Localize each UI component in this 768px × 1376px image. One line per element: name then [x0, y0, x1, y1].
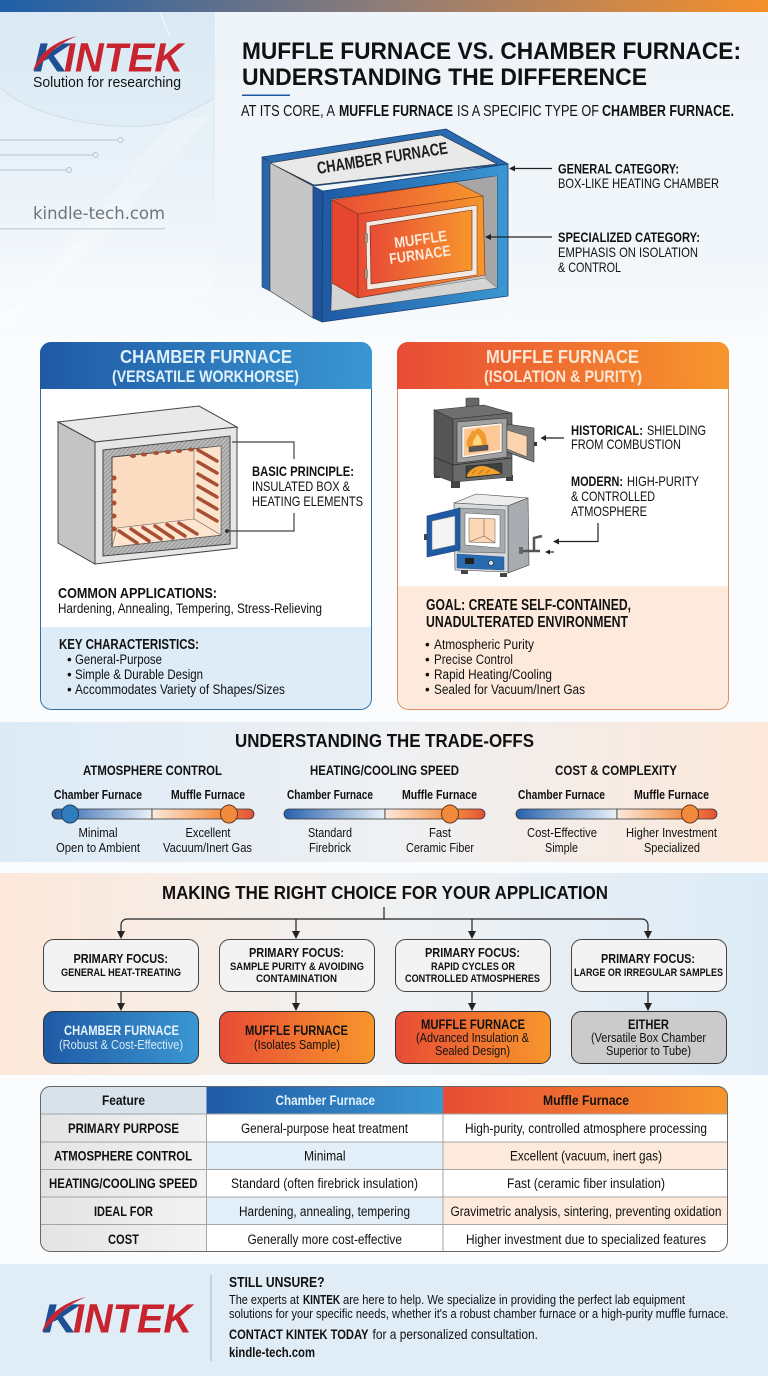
- decorative circuit lines: [0, 138, 123, 172]
- arrow: historical: [540, 435, 564, 441]
- text: basic principle: HEATING ELEMENTS: [252, 493, 363, 509]
- result box: chamber furnace: (Robust & Cost-Effective): [59, 1037, 183, 1052]
- callout: specialized category: & CONTROL: [558, 259, 621, 275]
- callout: general category: GENERAL CATEGORY:: [558, 160, 679, 176]
- row: heating/cooling speed: Standard (often firebrick insulation): [231, 1176, 418, 1191]
- text: modern: ATMOSPHERE: [571, 503, 647, 519]
- result box: muffle furnace advanced insulation: (Advanced Insulation &: [416, 1030, 529, 1045]
- callout: specialized category: SPECIALIZED CATEGORY:: [558, 229, 700, 245]
- goal band: [398, 586, 728, 709]
- row: atmosphere control: Excellent (vacuum, inert gas): [510, 1148, 662, 1164]
- row: heating/cooling speed: Fast (ceramic fiber insulation): [507, 1176, 665, 1191]
- result box: chamber furnace: CHAMBER FURNACE: [64, 1023, 179, 1038]
- result box: muffle furnace isolates sample: [220, 1012, 374, 1064]
- text: historical: SHIELDING: [647, 422, 706, 438]
- row: ideal for: IDEAL FOR: [94, 1203, 153, 1219]
- text: basic principle: BASIC PRINCIPLE:: [252, 463, 354, 479]
- muffle panel header: [397, 342, 729, 389]
- call to action text: [229, 1274, 728, 1360]
- logo: KINTEK header: K: [33, 34, 73, 80]
- key characteristics band: •: [67, 652, 72, 667]
- slider: heating/cooling speed: Ceramic Fiber: [406, 840, 475, 855]
- key characteristics band: General-Purpose: [75, 652, 162, 667]
- section: right choice: [0, 873, 768, 1075]
- title: MUFFLE FURNACE VS. CHAMBER FURNACE:: [242, 38, 741, 65]
- slider: heating/cooling speed: HEATING/COOLING SPEED: [310, 762, 459, 778]
- call to action text: KINTEK: [303, 1292, 340, 1307]
- callout: specialized category: [558, 229, 700, 275]
- icon: modern muffle furnace: [424, 494, 542, 577]
- result box: either: EITHER: [628, 1017, 669, 1032]
- result box: muffle furnace isolates sample: (Isolates Sample): [254, 1037, 340, 1052]
- text: common applications: COMMON APPLICATIONS:: [58, 585, 217, 602]
- slider: atmosphere control: Muffle Furnace: [171, 787, 245, 802]
- slider: atmosphere control: Open to Ambient: [56, 840, 140, 855]
- diagram: chamber furnace containing muffle furnace: [262, 129, 508, 322]
- focus box: rapid cycles: PRIMARY FOCUS:: [425, 945, 520, 960]
- result box: muffle furnace advanced insulation: [396, 1012, 550, 1064]
- slider: cost and complexity: Cost-Effective: [527, 825, 597, 840]
- chamber panel header: (VERSATILE WORKHORSE): [112, 368, 299, 386]
- call to action text: kindle-tech.com: [229, 1344, 315, 1360]
- goal band: Sealed for Vacuum/Inert Gas: [434, 682, 585, 697]
- comparison table: [40, 1086, 728, 1252]
- table header row: Chamber Furnace: [276, 1093, 375, 1108]
- muffle panel header: MUFFLE FURNACE: [486, 347, 639, 367]
- row: primary purpose: PRIMARY PURPOSE: [68, 1120, 179, 1136]
- subtitle: AT ITS CORE, A: [241, 103, 336, 120]
- result box: chamber furnace: [44, 1012, 198, 1064]
- logo: KINTEK footer: K: [42, 1296, 82, 1342]
- text: modern: [571, 473, 700, 519]
- logo: KINTEK header: Solution for researching: [33, 74, 181, 91]
- call to action text: The experts at: [229, 1292, 299, 1307]
- slider: atmosphere control: Excellent: [186, 825, 231, 840]
- row: primary purpose: High-purity, controlled atmosphere processing: [465, 1121, 707, 1136]
- chamber panel header: CHAMBER FURNACE: [120, 347, 292, 367]
- row: atmosphere control: [54, 1148, 662, 1164]
- row: atmosphere control: Minimal: [304, 1148, 346, 1164]
- focus box: sample purity: SAMPLE PURITY & AVOIDING: [230, 961, 364, 973]
- goal band: •: [425, 682, 430, 697]
- result box: muffle furnace advanced insulation: MUFFLE FURNACE: [421, 1017, 525, 1032]
- panel: muffle furnace: [397, 342, 729, 710]
- table header row: Feature: [102, 1093, 145, 1108]
- focus box: rapid cycles: RAPID CYCLES OR: [431, 961, 515, 973]
- call to action text: are here to help. We specialize in providing the perfect lab equipment: [343, 1292, 685, 1307]
- website label: kindle-tech.com: [33, 204, 165, 224]
- text: modern: MODERN:: [571, 473, 623, 489]
- goal band: GOAL: CREATE SELF-CONTAINED,: [426, 597, 631, 614]
- slider: cost and complexity: Chamber Furnace: [518, 787, 605, 802]
- goal band: Atmospheric Purity: [434, 637, 534, 652]
- arrow: general category: [509, 166, 552, 172]
- logo: KINTEK header: INTEK: [64, 34, 186, 80]
- text: modern: & CONTROLLED: [571, 488, 655, 504]
- call to action text: STILL UNSURE?: [229, 1274, 324, 1291]
- row: cost: COST: [108, 1231, 139, 1247]
- row: atmosphere control: ATMOSPHERE CONTROL: [54, 1148, 192, 1164]
- table header row: Muffle Furnace: [543, 1093, 629, 1108]
- row: ideal for: [94, 1203, 722, 1219]
- text: modern: HIGH-PURITY: [627, 473, 700, 489]
- goal band: •: [425, 637, 430, 652]
- table header row: [102, 1093, 629, 1108]
- slider: atmosphere control: Chamber Furnace: [54, 787, 142, 802]
- focus box: rapid cycles: [396, 940, 550, 992]
- text: basic principle: INSULATED BOX &: [252, 478, 351, 494]
- slider: heating/cooling speed: Fast: [429, 825, 451, 840]
- slider: heating/cooling speed: [284, 762, 485, 855]
- chamber panel header: [40, 342, 372, 389]
- focus box: rapid cycles: CONTROLLED ATMOSPHERES: [405, 973, 540, 985]
- decision tree connectors: [117, 907, 652, 1011]
- text: historical: HISTORICAL:: [571, 422, 643, 438]
- goal band: Precise Control: [434, 652, 513, 667]
- goal band: •: [425, 667, 430, 682]
- slider: heating/cooling speed: Chamber Furnace: [287, 787, 373, 802]
- slider: cost and complexity: Simple: [545, 840, 578, 855]
- focus box: sample purity: [220, 940, 374, 992]
- key characteristics band: Simple & Durable Design: [75, 667, 203, 682]
- goal band: •: [425, 652, 430, 667]
- muffle panel header: (ISOLATION & PURITY): [484, 368, 642, 386]
- logo: KINTEK header: [33, 34, 186, 91]
- key characteristics band: Accommodates Variety of Shapes/Sizes: [75, 682, 285, 697]
- diagram: chamber furnace containing muffle furnace: MUFFLE: [393, 228, 448, 252]
- diagram: chamber furnace containing muffle furnace: CHAMBER FURNACE: [316, 139, 449, 178]
- top colour bar: [0, 0, 768, 12]
- slider: atmosphere control: [52, 762, 254, 855]
- call to action text: for a personalized consultation.: [372, 1326, 538, 1342]
- callout: general category: [558, 160, 719, 191]
- subtitle: CHAMBER FURNACE.: [602, 103, 734, 120]
- goal band: Rapid Heating/Cooling: [434, 667, 552, 682]
- callout: specialized category: EMPHASIS ON ISOLATION: [558, 244, 698, 260]
- focus box: large samples: [572, 940, 726, 992]
- result box: muffle furnace isolates sample: MUFFLE FURNACE: [245, 1023, 348, 1038]
- slider: heating/cooling speed: Standard: [308, 825, 352, 840]
- subtitle: [241, 103, 734, 120]
- slider: atmosphere control: ATMOSPHERE CONTROL: [83, 762, 222, 778]
- callout lines: basic principle: [226, 442, 294, 532]
- logo: KINTEK footer: INTEK: [73, 1296, 195, 1342]
- row: primary purpose: General-purpose heat treatment: [241, 1121, 408, 1136]
- focus box: sample purity: CONTAMINATION: [256, 973, 337, 985]
- row: cost: [108, 1231, 706, 1247]
- title: UNDERSTANDING THE DIFFERENCE: [242, 64, 647, 91]
- call to action text: CONTACT KINTEK TODAY: [229, 1326, 369, 1342]
- slider: heating/cooling speed: Muffle Furnace: [402, 787, 477, 802]
- row: ideal for: Hardening, annealing, tempering: [239, 1204, 410, 1219]
- arrow: modern: [545, 523, 598, 554]
- text: common applications: Hardening, Annealing, Tempering, Stress-Relieving: [58, 601, 322, 616]
- diagram: chamber furnace containing muffle furnace: FURNACE: [388, 242, 452, 268]
- row: heating/cooling speed: [49, 1175, 665, 1191]
- row: heating/cooling speed: HEATING/COOLING SPEED: [49, 1175, 198, 1191]
- section: trade-offs: [0, 722, 768, 862]
- choice heading: MAKING THE RIGHT CHOICE FOR YOUR APPLICATION: [162, 882, 608, 903]
- key characteristics band: [41, 627, 371, 709]
- text: basic principle: [252, 463, 363, 509]
- slider: cost and complexity: Specialized: [644, 840, 700, 855]
- result box: either: (Versatile Box Chamber: [591, 1030, 707, 1045]
- title: [242, 38, 741, 96]
- focus box: large samples: PRIMARY FOCUS:: [601, 951, 695, 966]
- slider: cost and complexity: Muffle Furnace: [634, 787, 709, 802]
- icon: historical stove furnace: [434, 398, 537, 488]
- slider: cost and complexity: Higher Investment: [626, 825, 717, 840]
- text: common applications: [58, 585, 322, 616]
- result box: muffle furnace advanced insulation: Sealed Design): [435, 1043, 510, 1058]
- trade-offs heading: UNDERSTANDING THE TRADE-OFFS: [235, 731, 534, 751]
- focus box: general heat-treating: GENERAL HEAT-TREATING: [61, 967, 181, 979]
- slider: cost and complexity: [516, 762, 717, 855]
- key characteristics band: •: [67, 667, 72, 682]
- panel: chamber furnace: [40, 342, 372, 710]
- result box: either: Superior to Tube): [606, 1043, 691, 1058]
- row: cost: Generally more cost-effective: [248, 1232, 402, 1247]
- text: historical: FROM COMBUSTION: [571, 436, 681, 452]
- diagram: insulated box with heating elements: [58, 406, 237, 564]
- goal band: UNADULTERATED ENVIRONMENT: [426, 614, 628, 631]
- row: cost: Higher investment due to specialized features: [466, 1232, 706, 1247]
- focus box: large samples: LARGE OR IRREGULAR SAMPLES: [574, 967, 723, 979]
- text: historical: [571, 422, 706, 452]
- key characteristics band: •: [67, 682, 72, 697]
- callout: general category: BOX-LIKE HEATING CHAMBER: [558, 175, 719, 191]
- slider: cost and complexity: COST & COMPLEXITY: [555, 762, 678, 778]
- slider: heating/cooling speed: Firebrick: [309, 840, 351, 855]
- focus box: general heat-treating: PRIMARY FOCUS:: [74, 951, 168, 966]
- row: ideal for: Gravimetric analysis, sintering, preventing oxidation: [450, 1204, 722, 1219]
- row: primary purpose: [68, 1120, 707, 1136]
- subtitle: IS A SPECIFIC TYPE OF: [457, 103, 599, 120]
- key characteristics band: KEY CHARACTERISTICS:: [59, 637, 199, 653]
- focus box: sample purity: PRIMARY FOCUS:: [249, 945, 344, 960]
- result box: either: [572, 1012, 726, 1064]
- subtitle: MUFFLE FURNACE: [339, 103, 453, 120]
- footer: [0, 1264, 768, 1376]
- focus box: general heat-treating: [44, 940, 198, 992]
- slider: atmosphere control: Vacuum/Inert Gas: [163, 840, 252, 855]
- slider: atmosphere control: Minimal: [78, 825, 118, 840]
- arrow: specialized category: [485, 234, 552, 240]
